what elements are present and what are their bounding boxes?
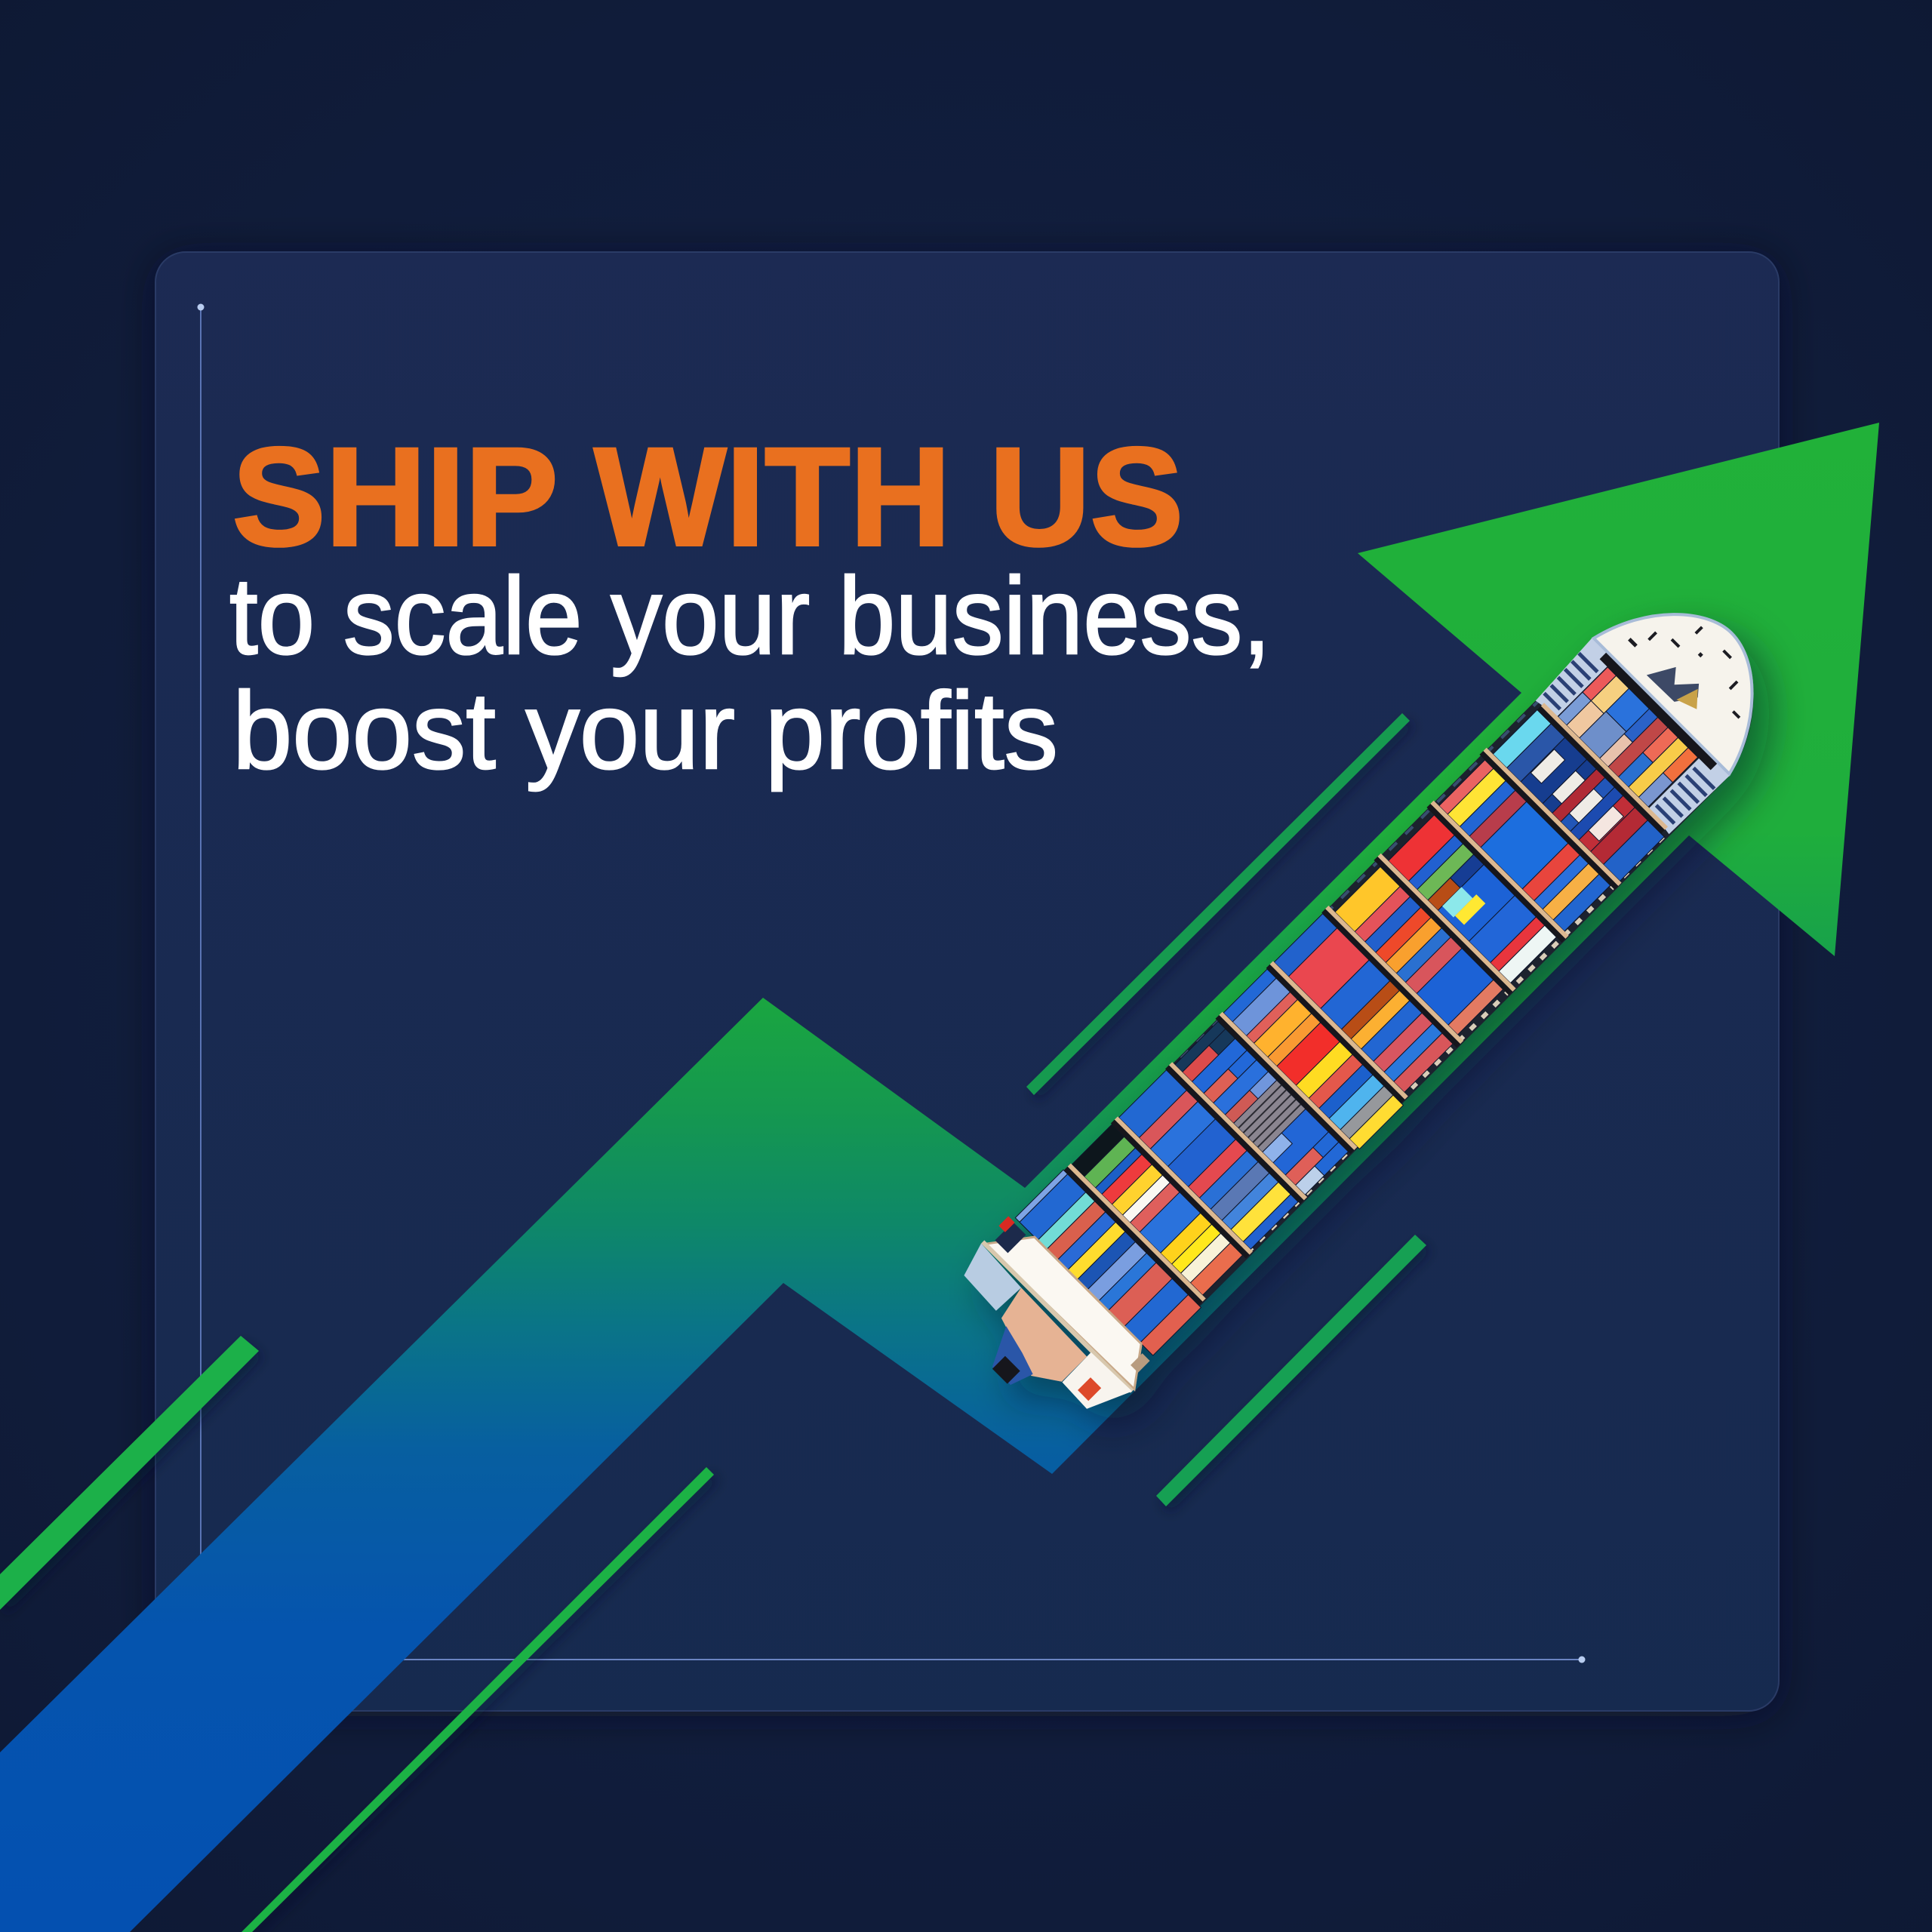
hull edge details <box>1117 700 1669 1253</box>
bay I containers <box>1493 709 1664 881</box>
bay C containers <box>1175 1021 1349 1195</box>
stern bay containers <box>1015 1170 1201 1355</box>
bay F containers <box>1335 866 1503 1035</box>
bay E containers <box>1274 914 1453 1092</box>
bow deck <box>1594 567 1801 774</box>
bow deck machinery <box>1620 597 1766 743</box>
stern details <box>924 1217 1158 1450</box>
accent line: left <box>0 1336 259 1610</box>
chart axes <box>198 303 1585 1663</box>
grey container lines <box>1238 1085 1301 1147</box>
bay J containers <box>1558 667 1698 807</box>
mint and yellow containers <box>1442 883 1485 927</box>
container ship <box>924 562 1811 1450</box>
bay B containers <box>1118 1070 1298 1249</box>
accent line: bottom <box>242 1467 714 1932</box>
bay H containers <box>1439 760 1611 931</box>
title: SHIP WITH US <box>232 420 1183 575</box>
bow hull ribs <box>1533 637 1730 835</box>
growth arrow <box>0 423 1879 1932</box>
subtitle line 2: boost your profits <box>232 669 1058 792</box>
ship crossbeams <box>1064 639 1730 1306</box>
accent line: below ship <box>1156 1235 1426 1506</box>
ship hull <box>1017 568 1803 1355</box>
accent line: above ship <box>1026 713 1410 1095</box>
bay D containers <box>1223 969 1403 1149</box>
bay G containers <box>1389 815 1556 983</box>
subtitle line 1: to scale your business, <box>229 555 1271 677</box>
panel: chart frame <box>155 252 1779 1711</box>
bay A containers <box>1072 1124 1243 1295</box>
stern deck <box>985 1216 1161 1391</box>
